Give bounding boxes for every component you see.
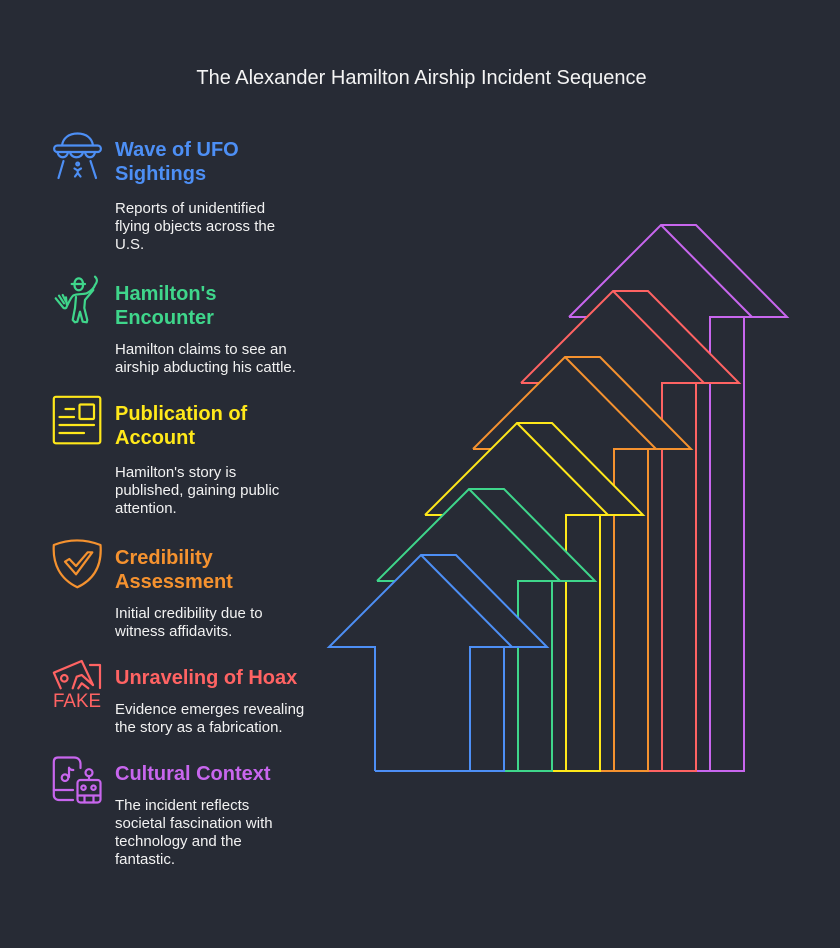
icon: fake photo <box>52 660 102 709</box>
text: Hamilton's encounter: Hamilton claims to see an <box>115 341 287 358</box>
text: publication of account: published, gaining public <box>115 482 279 499</box>
icon: UFO <box>53 132 102 180</box>
text: publication of account <box>115 464 279 517</box>
heading: wave of UFO sightings <box>115 139 239 185</box>
text: wave of UFO sightings <box>115 200 275 253</box>
text: unraveling of hoax: the story as a fabrication. <box>115 719 283 736</box>
arrow: wave of UFO sightings (blue) <box>329 555 547 771</box>
text: wave of UFO sightings: U.S. <box>115 236 144 253</box>
arrow: publication of account (yellow) <box>425 423 643 771</box>
heading: Hamilton's encounter <box>115 283 216 329</box>
text: cultural context: fantastic. <box>115 851 175 868</box>
heading: Hamilton's encounter: Hamilton's <box>115 283 216 305</box>
text: wave of UFO sightings: flying objects across the <box>115 218 275 235</box>
text: cultural context: technology and the <box>115 833 242 850</box>
heading: publication of account <box>115 403 248 449</box>
icon: newspaper <box>52 396 102 444</box>
text: unraveling of hoax: Evidence emerges revealing <box>115 701 304 718</box>
heading: publication of account: Publication of <box>115 403 247 425</box>
icon: phone with music note and robot <box>52 756 102 804</box>
text: publication of account: Hamilton's story is <box>115 464 236 481</box>
text: unraveling of hoax <box>115 701 304 736</box>
icon: shield with check <box>52 539 102 588</box>
heading: credibility assessment: Credibility <box>115 547 213 569</box>
arrow: unraveling of hoax (red) <box>521 291 739 771</box>
text: Hamilton's encounter: airship abducting his cattle. <box>115 359 296 376</box>
heading: unraveling of hoax: Unraveling of Hoax <box>115 667 297 689</box>
text: cultural context: The incident reflects <box>115 797 249 814</box>
heading: publication of account: Account <box>115 427 195 449</box>
text: publication of account: attention. <box>115 500 177 517</box>
text: cultural context: societal fascination with <box>115 815 273 832</box>
heading: wave of UFO sightings: Sightings <box>115 163 206 185</box>
heading: cultural context: Cultural Context <box>115 763 271 785</box>
title: The Alexander Hamilton Airship Incident Sequence <box>196 67 647 89</box>
text: wave of UFO sightings: Reports of unidentified <box>115 200 265 217</box>
heading: credibility assessment: Assessment <box>115 571 233 593</box>
heading: wave of UFO sightings: Wave of UFO <box>115 139 239 161</box>
arrow: Hamilton's encounter (green) <box>377 489 595 771</box>
heading: credibility assessment <box>115 547 233 593</box>
text: credibility assessment <box>115 605 263 640</box>
arrow: cultural context (purple) <box>569 225 787 771</box>
text: cultural context <box>115 797 273 868</box>
text: credibility assessment: Initial credibility due to <box>115 605 263 622</box>
icon: farmer with lasso <box>54 276 98 324</box>
text: Hamilton's encounter <box>115 341 296 376</box>
text: credibility assessment: witness affidavits. <box>115 623 232 640</box>
arrow: credibility assessment (orange) <box>473 357 691 771</box>
heading: Hamilton's encounter: Encounter <box>115 307 214 329</box>
